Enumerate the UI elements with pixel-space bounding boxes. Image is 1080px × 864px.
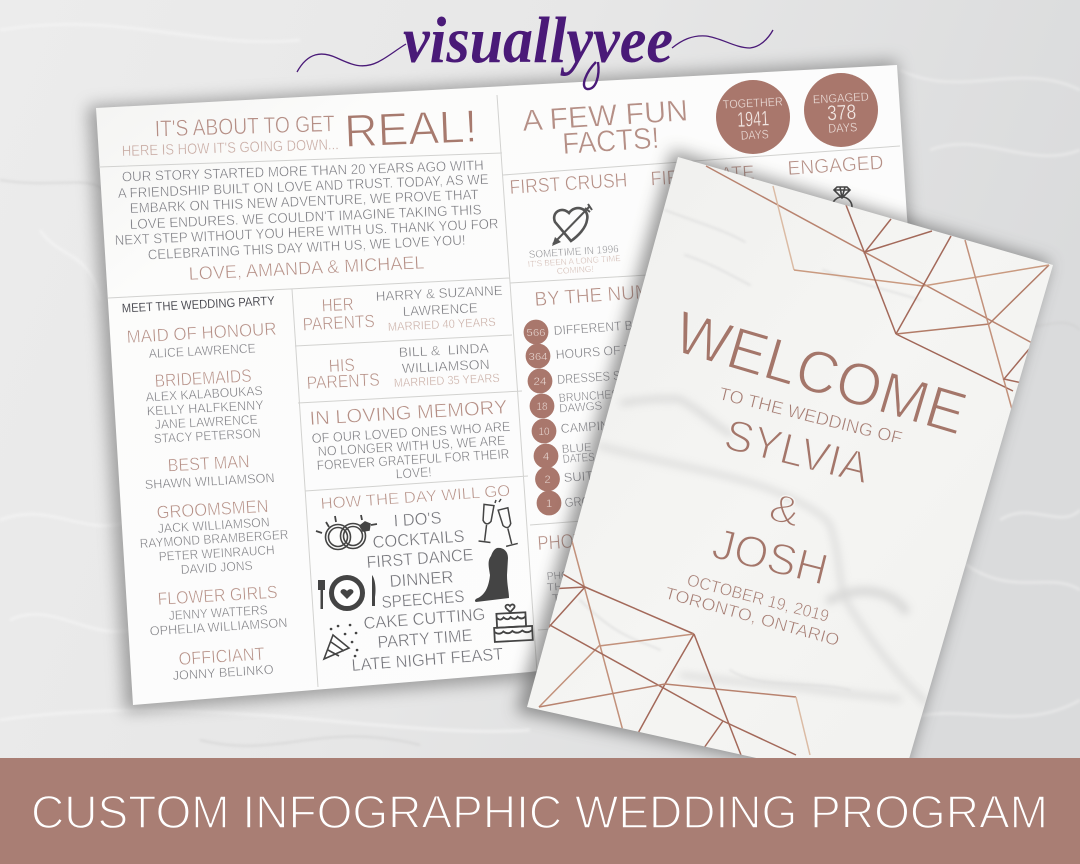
heading: a few fun facts: FACTS! [561,122,660,161]
panel: photo note: THE BEST [546,578,607,594]
heading: a few fun facts: A FEW FUN [521,94,689,138]
text block: our story: EMBARK ON THIS NEW ADVENTURE, WE PROVE THAT [129,186,479,216]
panel: by the numbers: 24 [534,376,546,388]
stat circle: together 1941 days: TOGETHER [722,94,783,112]
panel: how the day will go: CAKE CUTTING [363,605,486,633]
stat circle: engaged 378 days: ENGAGED [812,90,869,106]
icon: champagne flutes [479,499,518,546]
panel: his parents: WILLIAMSON [401,357,490,376]
icon: wedding cake [493,603,533,642]
shadow of the front cover [516,150,1050,790]
panel: in loving memory: NO LONGER WITH US, WE ARE [317,433,506,459]
icon: heart with arrow [552,204,592,246]
text block: our story: CELEBRATING THIS DAY WITH US, WE LOVE YOU! [147,232,466,262]
panel: how the day will go [316,483,533,675]
panel: timeline headings: FIRST CRUSH [509,169,628,199]
panel: how the day will go: LATE NIGHT FEAST [351,644,504,675]
panel: by the numbers: CAMPING [560,417,619,436]
panel: in loving memory: IN LOVING MEMORY [309,396,508,430]
panel: in loving memory: FOREVER GRATEFUL FOR THEIR [316,446,510,473]
panel: by the numbers: BY THE NUMBERS [534,277,703,311]
heading: it's about to get real: IT'S ABOUT TO GET [154,110,335,141]
panel: her parents: LAWRENCE [402,300,478,319]
panel: his parents: BILL & LINDA [398,341,489,360]
heading: it's about to get real [122,100,478,160]
text: first crush caption: SOMETIME IN 1996 [528,243,619,261]
heading: it's about to get real: HERE IS HOW IT'S GOING DOWN... [122,136,339,160]
text block: our story [114,157,499,284]
panel: meet the wedding party: JENNY WATTERS [168,602,268,623]
panel: his parents [306,341,500,393]
panel: timeline headings: FIRST DATE [650,162,755,190]
text block: our story: NEXT STEP WITHOUT YOU HERE WITH US. THANK YOU FOR [114,215,499,248]
date and place: TORONTO, ONTARIO [663,584,841,650]
panel: meet the wedding party: STACY PETERSON [153,425,261,446]
panel: meet the wedding party: PETER WEINRAUCH [158,542,275,564]
panel: meet the wedding party: OPHELIA WILLIAMSON [149,615,288,638]
text block: our story: A FRIENDSHIP BUILT ON LOVE AND TRUST. TODAY, AS WE [118,171,489,201]
panel: open inside spread [96,65,915,705]
icon: party popper [324,625,357,659]
text: first crush caption [527,243,621,276]
panel: meet the wedding party: FLOWER GIRLS [157,582,278,609]
heading: it's about to get real: REAL! [343,100,478,157]
logo: visuallyvee: visuallyvee [403,4,673,77]
text block: our story: LOVE ENDURES. WE COULDN'T IMAGINE TAKING THIS [129,201,482,232]
panel: meet the wedding party: JACK WILLIAMSON [157,514,270,536]
panel: her parents: HER [321,294,354,315]
panel: timeline headings [509,152,884,199]
panel: how the day will go: COCKTAILS [372,527,465,552]
panel: by the numbers: 1 [546,498,552,510]
panel: by the numbers: 2 [544,474,551,486]
panel: by the numbers: HOURS OF TV [555,341,640,362]
geometric rose gold lines: bottom left [539,541,810,755]
panel: in loving memory: LOVE! [395,464,432,481]
panel: how the day will go: HOW THE DAY WILL GO [320,483,511,513]
stat circle: engaged 378 days: 378 [827,101,857,125]
panel: photo note: PHOTOS BY [546,567,608,583]
panel: his parents: PARENTS [306,369,380,393]
panel: how the day will go: DINNER [389,567,454,591]
panel: photo note: PHOTOS [537,528,608,555]
panel: by the numbers: DRESSES SHOPPED [557,364,667,387]
logo: visuallyvee [297,4,773,89]
stat circle: together 1941 days: DAYS [740,127,769,143]
panel: by the numbers: 364 [528,351,548,363]
couple names [708,410,875,595]
panel: how the day will go: FIRST DANCE [366,545,474,572]
stat circle: together 1941 days: 1941 [737,107,770,132]
stat circle: engaged 378 days: DAYS [828,120,858,136]
panel: meet the wedding party: JONNY BELINKO [172,662,274,683]
panel: meet the wedding party: DAVID JONS [180,558,253,577]
panel: by the numbers [524,277,703,515]
panel: by the numbers: SUITS [563,467,602,485]
panel: meet the wedding party [121,294,289,683]
panel: by the numbers: BLUE [561,440,592,456]
couple names: & [765,485,805,536]
text: first crush caption: COMING! [556,264,594,276]
panel: meet the wedding party: BRIDEMAIDS [154,366,252,391]
panel: her parents: HARRY & SUZANNE [375,283,503,304]
panel: his parents: HIS [328,355,355,376]
panel: by the numbers: 18 [536,401,548,413]
panel: meet the wedding party: ALICE LAWRENCE [148,340,256,361]
title: welcome: TO THE WEDDING OF [717,383,904,448]
panel: meet the wedding party: JANE LAWRENCE [154,412,258,432]
bottom banner [0,758,1080,864]
panel: by the numbers: 566 [526,327,546,339]
shadow of the inside spread [88,60,915,712]
panel: meet the wedding party: MEET THE WEDDING PARTY [121,294,276,315]
panel: how the day will go: PARTY TIME [377,626,473,652]
panel: meet the wedding party: RAYMOND BRAMBERGER [139,527,289,551]
couple names: SYLVIA [720,410,875,493]
panel: meet the wedding party: SHAWN WILLIAMSON [144,470,275,492]
panel: photo note: TEAM [551,590,592,605]
couple names: JOSH [708,519,833,595]
panel: marble front cover [527,157,1053,790]
panel: by the numbers: DIFFERENT BARS [553,316,658,338]
title: welcome: WELCOME [667,298,974,448]
bottom banner: CUSTOM INFOGRAPHIC WEDDING PROGRAM [31,786,1048,838]
panel: her parents: MARRIED 40 YEARS [387,315,496,334]
panel: timeline headings: ENGAGED [787,152,884,180]
panel: by the numbers: 10 [538,426,550,438]
text block: our story: OUR STORY STARTED MORE THAN 20 YEARS AGO WITH [122,157,484,184]
panel: his parents: MARRIED 35 YEARS [393,371,500,390]
icon: dancing couple [475,548,509,602]
text block: our story: LOVE, AMANDA & MICHAEL [188,251,425,284]
geometric rose gold lines: top right [706,166,1049,413]
panel: how the day will go: I DO'S [393,508,442,530]
panel: in loving memory: OF OUR LOVED ONES WHO ARE [311,419,511,446]
stat circle: together 1941 days [716,80,790,154]
date and place: OCTOBER 19, 2019 [685,570,831,626]
stat circle: engaged 378 days [804,73,878,147]
panel: meet the wedding party: BEST MAN [167,451,250,475]
panel: photo note [537,528,608,605]
heading: a few fun facts [521,94,689,161]
icon: wedding rings [316,515,377,550]
panel: her parents: PARENTS [302,311,375,334]
icon: dinner plate and cutlery [318,575,376,609]
panel: meet the wedding party: GROOMSMEN [156,496,269,522]
panel: meet the wedding party: OFFICIANT [178,644,265,669]
panel: meet the wedding party: ALEX KALABOUKAS [145,383,263,404]
icon: engagement ring [832,187,852,217]
text: first crush caption: IT'S BEEN A LONG TIME [527,253,621,269]
panel: by the numbers: GROOM [564,492,609,510]
panel: meet the wedding party: KELLY HALFKENNY [146,397,264,418]
panel: her parents [302,283,503,334]
panel: how the day will go: SPEECHES [381,587,465,612]
panel: by the numbers: BRUNCHES [558,387,619,405]
panel: in loving memory [309,396,511,481]
panel: by the numbers: 4 [543,451,549,463]
marble veins [580,210,927,703]
panel: by the numbers: DAWGS [559,399,603,415]
panel: meet the wedding party: MAID OF HONOUR [126,319,277,347]
panel: by the numbers: DATES [562,450,595,466]
